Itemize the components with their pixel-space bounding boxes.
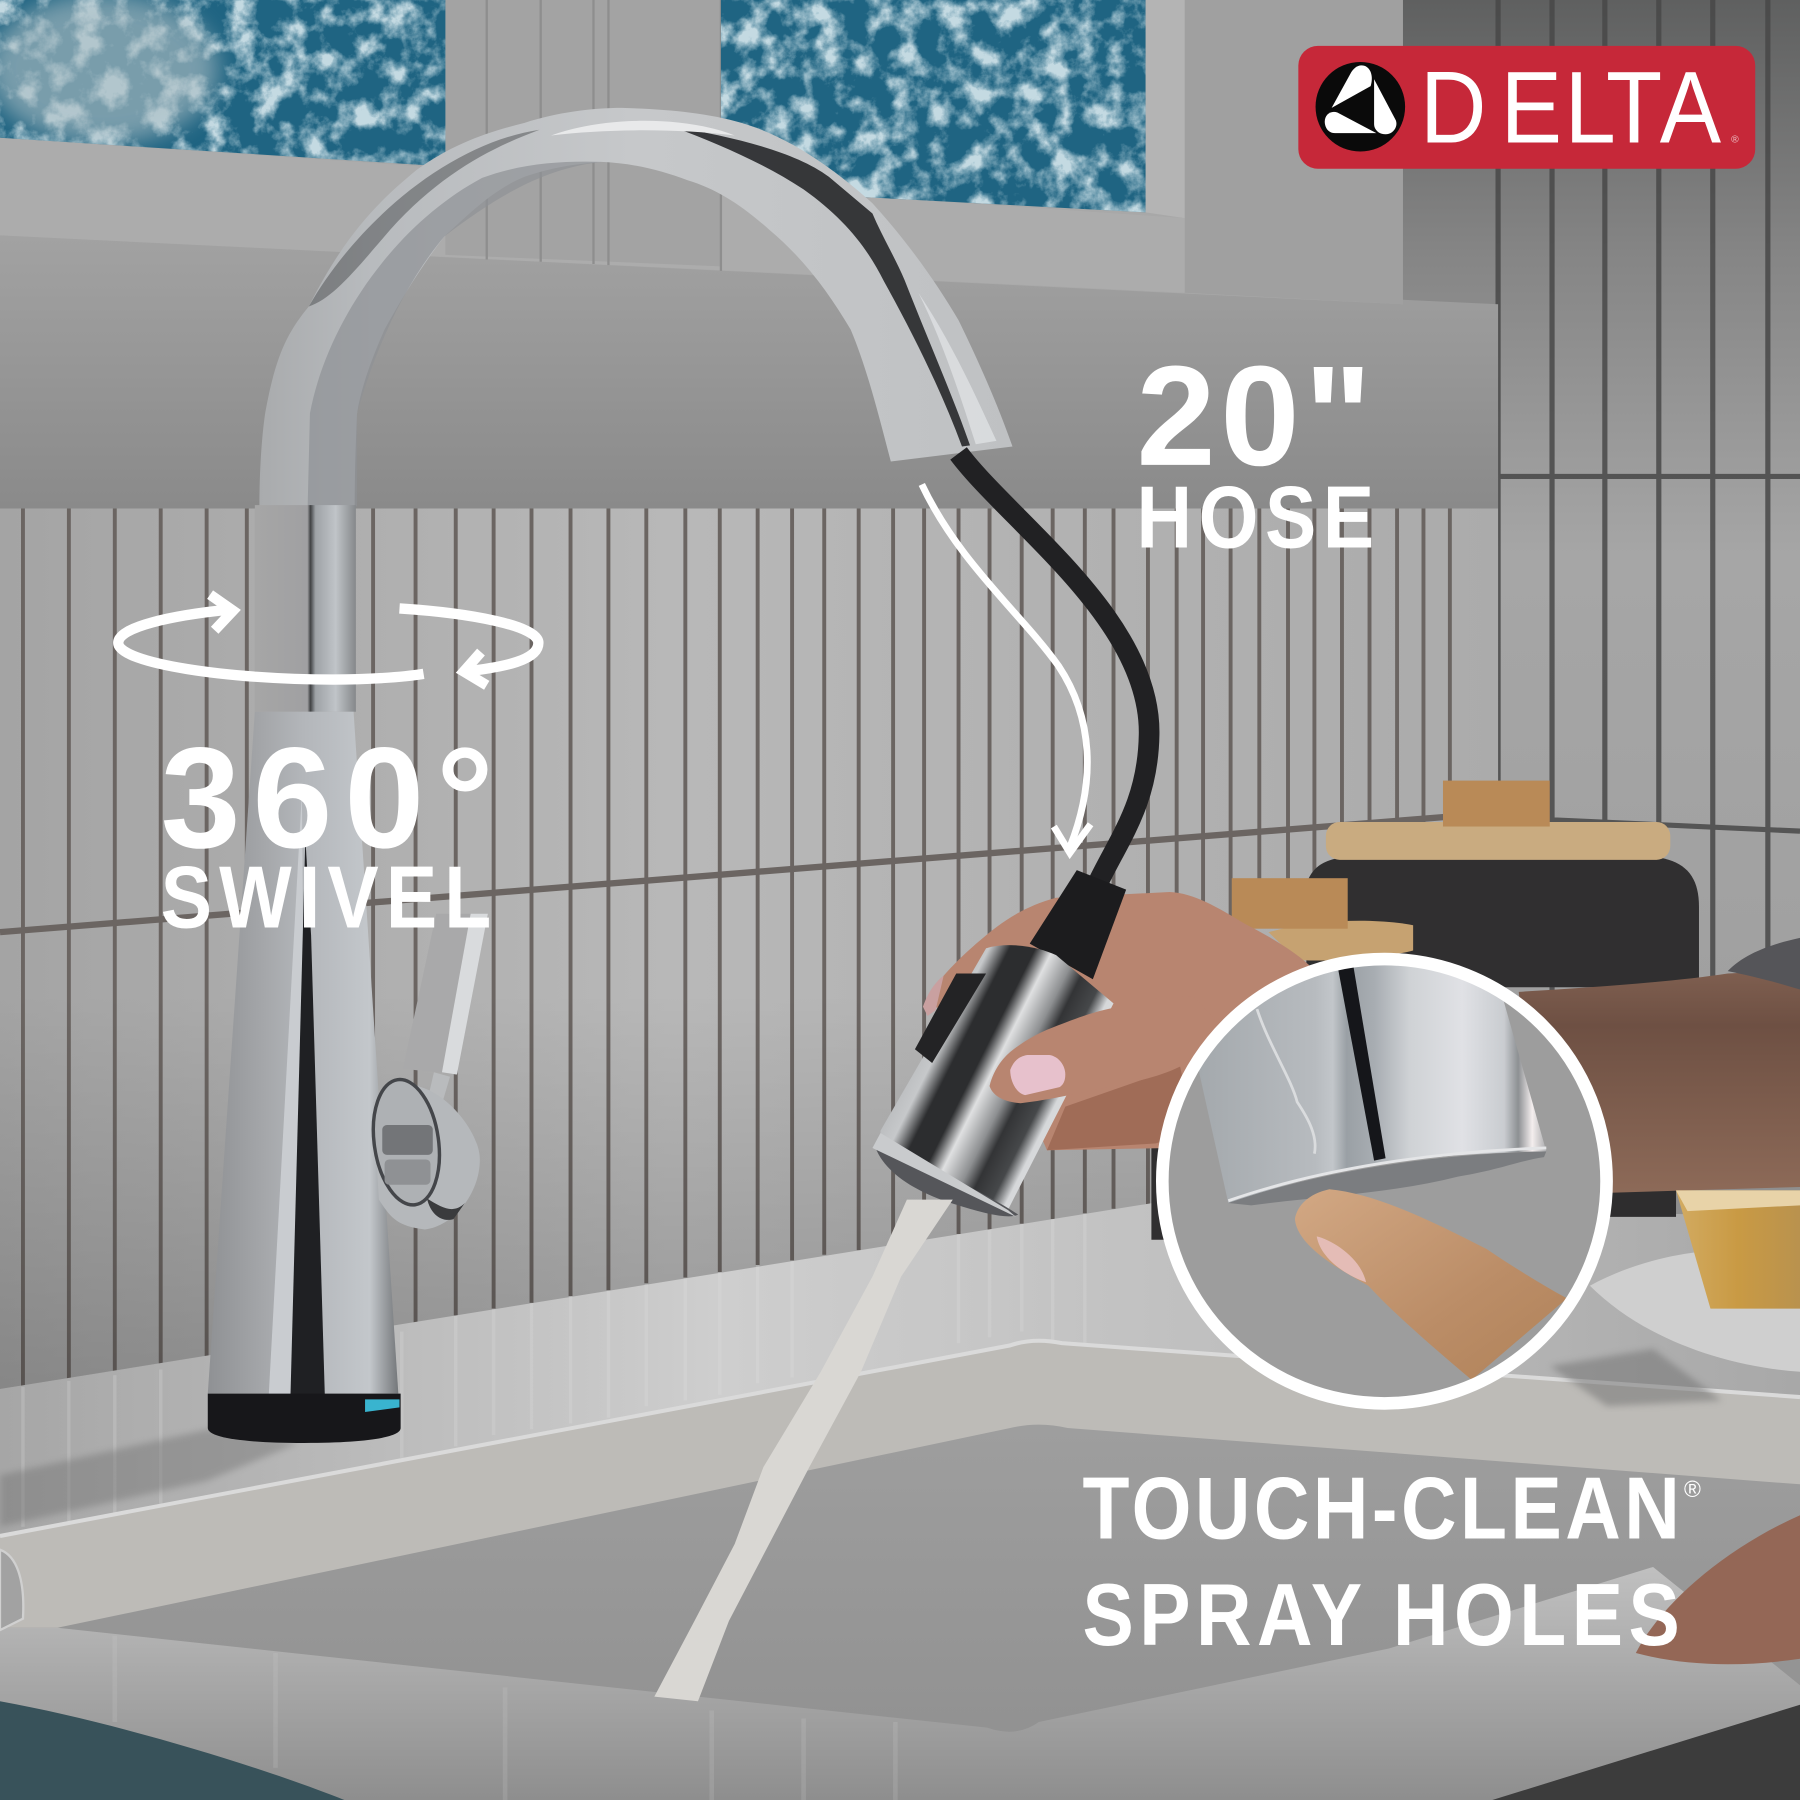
swivel right arc bbox=[399, 608, 538, 672]
panel: backsplash tiles bbox=[0, 509, 1498, 1389]
sink basin bbox=[0, 1425, 1800, 1800]
swivel left arrow head bbox=[210, 595, 233, 630]
label: touch-clean spray holes bbox=[1083, 1458, 1701, 1664]
faucet shadow bbox=[0, 1429, 298, 1527]
glass bbox=[0, 1550, 23, 1630]
sprayer bbox=[872, 870, 1126, 1217]
thumb nail bbox=[1010, 1055, 1065, 1095]
label: touch-clean spray holes: TOUCH-CLEAN bbox=[1083, 1458, 1680, 1557]
thumb bbox=[990, 996, 1217, 1103]
sprayer button bbox=[915, 973, 986, 1063]
fingernail bbox=[1317, 1236, 1366, 1282]
water stream bbox=[654, 1200, 953, 1701]
left hand behind sprayer bbox=[923, 892, 1314, 1150]
logo: Delta: ® bbox=[1731, 134, 1739, 145]
arch spout sliver bbox=[918, 293, 996, 444]
label: 20 inch hose: 20" bbox=[1136, 337, 1372, 496]
front counter reflection bbox=[115, 1636, 895, 1800]
arch left shadow line bbox=[309, 130, 540, 307]
label: touch-clean spray holes: ® bbox=[1684, 1476, 1701, 1502]
panel: right tile wall bbox=[1403, 0, 1800, 1010]
hose arrow bbox=[922, 484, 1091, 853]
logo wordmark: DELTA bbox=[1420, 50, 1721, 164]
arch top highlight bbox=[551, 121, 735, 135]
counter rim bbox=[0, 1341, 1800, 1800]
panel: window frame and wall bbox=[0, 0, 1498, 509]
label: 360 swivel: 360° bbox=[161, 718, 494, 878]
zoomed sprayer head bbox=[1182, 953, 1567, 1380]
logo icon bbox=[1316, 62, 1405, 152]
label: touch-clean spray holes: SPRAY HOLES bbox=[1083, 1565, 1680, 1664]
front counter bbox=[0, 1567, 1800, 1800]
faucet bbox=[208, 108, 1012, 1443]
panel: right hand bbox=[1636, 1515, 1800, 1664]
sprayer connector bbox=[1030, 870, 1126, 979]
swivel left arc bbox=[118, 610, 424, 680]
arch dark reflection bbox=[672, 126, 970, 447]
window views bbox=[0, 0, 1148, 218]
faucet neck bbox=[255, 505, 356, 712]
hose bbox=[959, 453, 1149, 886]
label: 20 inch hose: HOSE bbox=[1136, 468, 1374, 567]
label: 360 swivel: SWIVEL bbox=[161, 848, 491, 947]
faucet cone body bbox=[208, 712, 398, 1394]
sprayer body bbox=[880, 945, 1114, 1210]
faucet arch bbox=[259, 108, 1012, 506]
panel: muffin and plate bbox=[1550, 1190, 1800, 1406]
towel bbox=[0, 1701, 344, 1800]
faucet handle bbox=[366, 1075, 480, 1229]
logo: Delta bbox=[1298, 46, 1755, 169]
faucet lever bbox=[403, 914, 488, 1108]
faucet base bbox=[208, 1394, 401, 1443]
swivel right arrow head bbox=[464, 652, 487, 685]
cone dark reflection bbox=[290, 838, 325, 1397]
sprayer head bbox=[875, 1146, 1018, 1216]
panel: storage jars bbox=[1151, 781, 1699, 1240]
swivel arrows bbox=[118, 595, 538, 685]
label: 20 inch hose bbox=[1136, 337, 1374, 567]
cone light band bbox=[269, 792, 303, 1397]
panel: arm and sleeve bbox=[1519, 938, 1800, 1193]
panel: countertop bbox=[0, 1202, 1800, 1800]
zoomed finger bbox=[1295, 1189, 1567, 1380]
callout: touch-clean zoom circle bbox=[1162, 953, 1607, 1403]
arch inner band bbox=[308, 162, 602, 506]
